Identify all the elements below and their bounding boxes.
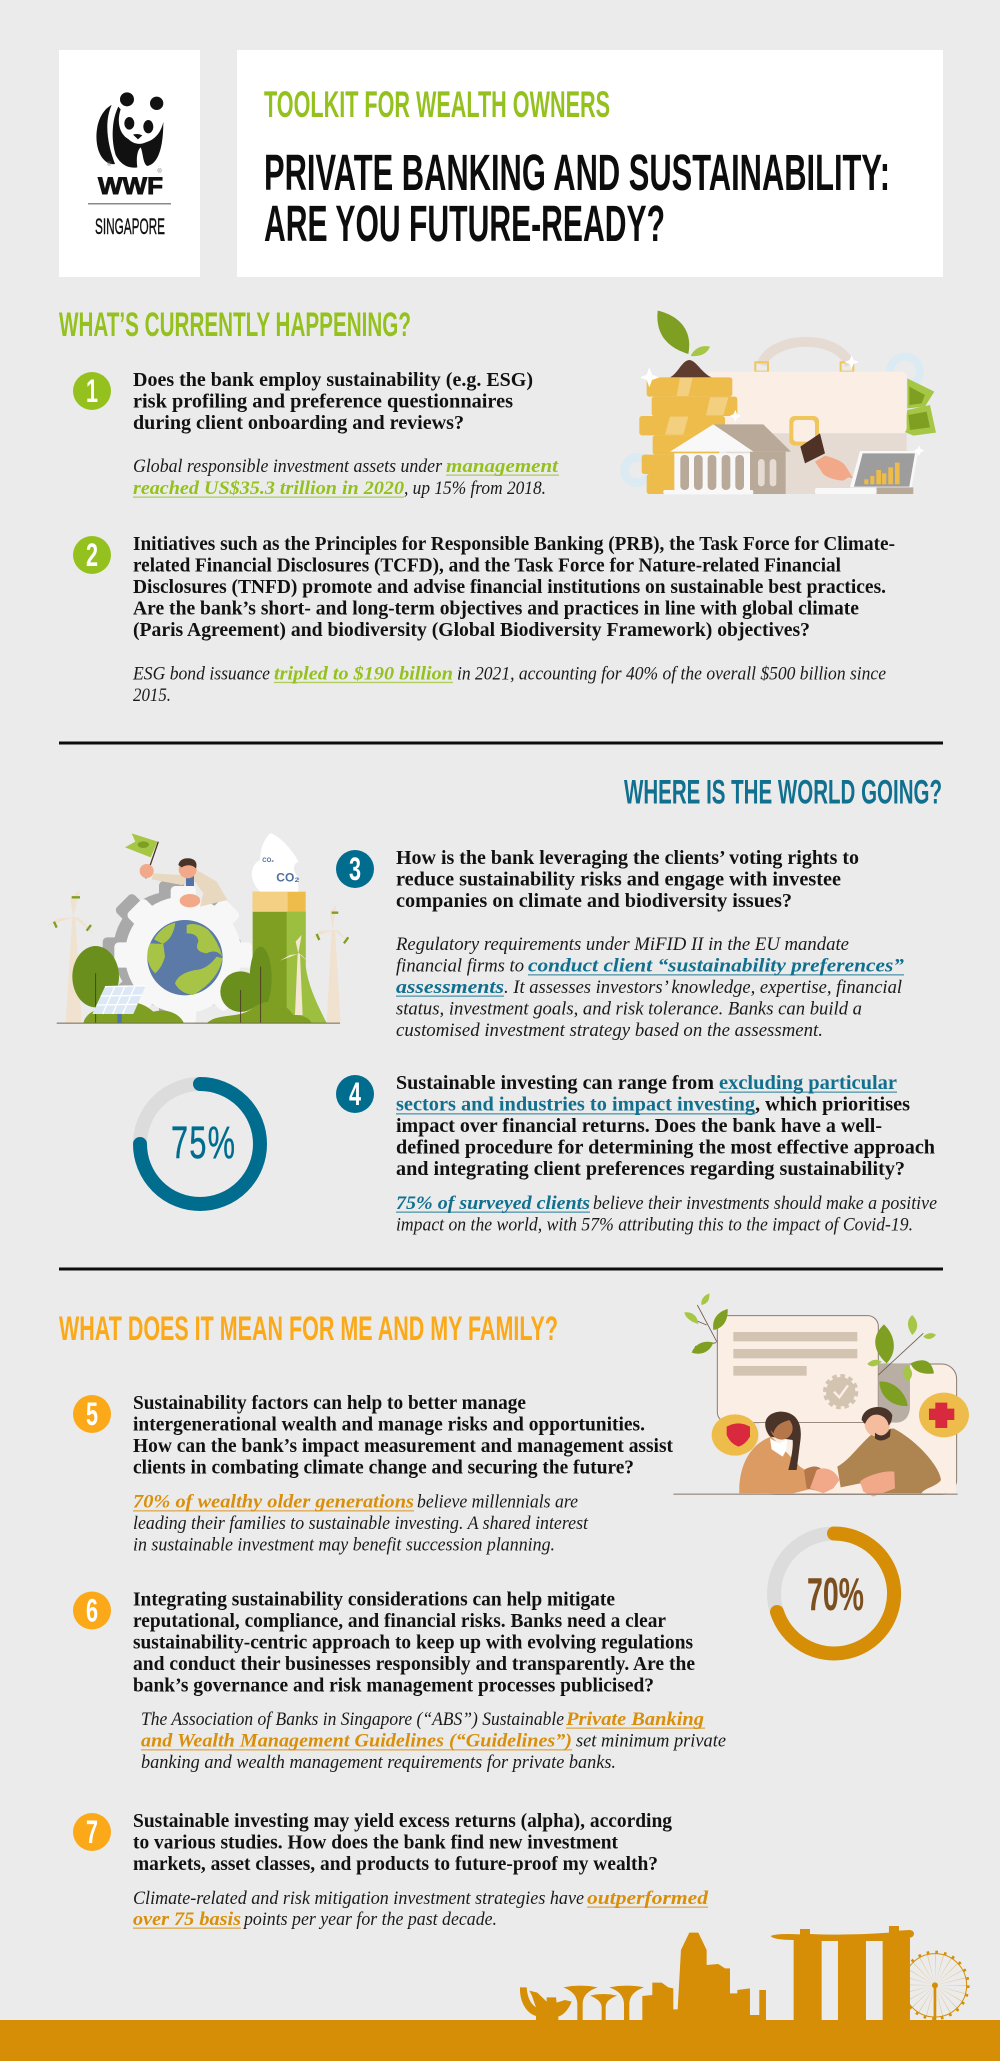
donut chart: 75% [140, 1084, 260, 1204]
badge 5: 5 [86, 1396, 98, 1432]
badge 2: 2 [86, 537, 98, 573]
title: ARE YOU FUTURE-READY? [264, 195, 665, 252]
statistic 4: impact on the world, with 57% attributing this to the impact of Covid-19. [396, 1215, 913, 1236]
statistic 5: in sustainable investment may benefit succession planning. [133, 1535, 555, 1556]
statistic 6: banking and wealth management requirements for private banks. [141, 1752, 616, 1773]
item 2 [73, 534, 895, 706]
question 2: (Paris Agreement) and biodiversity (Global Biodiversity Framework) objectives? [133, 620, 810, 641]
statistic 2: in 2021, accounting for 40% of the overall $500 billion since [457, 663, 886, 684]
statistic 7: over 75 basis [133, 1909, 241, 1930]
badge 3 [336, 850, 374, 888]
badge 4: 4 [349, 1076, 361, 1112]
badge 6 [73, 1592, 111, 1630]
question 5 [133, 1393, 674, 1478]
question 4: Sustainable investing can range from [396, 1073, 714, 1094]
donut chart: 70%: 70% [807, 1568, 864, 1620]
question 4: impact over financial returns. Does the bank have a well- [396, 1116, 882, 1137]
statistic 5: 70% of wealthy older generations [133, 1492, 414, 1513]
item 1 [73, 370, 559, 499]
kicker: toolkit: TOOLKIT FOR WEALTH OWNERS [264, 84, 610, 125]
statistic 2: ESG bond issuance [132, 663, 270, 684]
question 4: excluding particular [719, 1073, 897, 1094]
question 4: and integrating client preferences regarding sustainability? [396, 1159, 905, 1180]
statistic 2: tripled to $190 billion [274, 663, 453, 684]
statistic 3: . It assesses investors’ knowledge, expertise, financial [504, 977, 902, 998]
logo wordmark: WWF [98, 173, 163, 200]
question 1: risk profiling and preference questionnaires [133, 392, 513, 412]
statistic 7: points per year for the past decade. [242, 1909, 497, 1930]
statistic 3: assessments [396, 977, 504, 998]
statistic 1: management [446, 456, 559, 477]
statistic 6: and Wealth Management Guidelines (“Guidelines”) [141, 1731, 572, 1752]
question 3 [396, 848, 859, 912]
question 5: clients in combating climate change and securing the future? [133, 1457, 634, 1478]
illustration: gear, globe, chimney and wind turbines: CO₂ [276, 870, 300, 884]
question 4: defined procedure for determining the most effective approach [396, 1138, 935, 1159]
question 3: How is the bank leveraging the clients’ voting rights to [396, 848, 859, 869]
statistic 7: Climate-related and risk mitigation investment strategies have [133, 1888, 584, 1909]
item 5 [73, 1393, 674, 1556]
question 1 [133, 370, 533, 434]
statistic 7: outperformed [587, 1888, 709, 1909]
question 7: markets, asset classes, and products to future-proof my wealth? [133, 1854, 658, 1875]
icon: WWF panda [96, 92, 163, 175]
donut chart: 75%: 75% [171, 1118, 235, 1169]
item 6 [73, 1590, 726, 1773]
statistic 4: 75% of surveyed clients [396, 1193, 590, 1214]
donut chart: 70% [774, 1534, 894, 1654]
question 7: Sustainable investing may yield excess returns (alpha), according [133, 1811, 672, 1832]
statistic 1: , up 15% from 2018. [404, 478, 546, 499]
statistic 1 [133, 456, 559, 499]
panel: logo card [59, 50, 200, 277]
statistic 1: Global responsible investment assets under [133, 456, 443, 477]
heading: what's currently happening: WHAT’S CURRENTLY HAPPENING? [59, 306, 411, 344]
statistic 6 [141, 1709, 726, 1773]
question 6 [133, 1590, 695, 1697]
illustration: handshake, certificate and coins [673, 1293, 969, 1497]
illustration: Singapore skyline [520, 1926, 968, 2021]
icon: WWF panda: © [107, 161, 112, 168]
heading: what does it mean for me and my family: WHAT DOES IT MEAN FOR ME AND MY FAMILY? [59, 1310, 558, 1348]
logo country label: SINGAPORE [95, 214, 165, 239]
question 2: related Financial Disclosures (TCFD), and the Task Force for Nature-related Financial [133, 556, 842, 577]
statistic 3: financial firms to [396, 956, 524, 977]
question 2: Initiatives such as the Principles for Responsible Banking (PRB), the Task Force for Climate- [133, 534, 895, 555]
badge 4 [336, 1075, 374, 1113]
question 7: to various studies. How does the bank find new investment [133, 1833, 618, 1854]
question 2: Are the bank’s short- and long-term objectives and practices in line with global climate [133, 598, 859, 620]
question 1: Does the bank employ sustainability (e.g. ESG) [133, 370, 533, 391]
badge 3: 3 [349, 851, 361, 887]
illustration: gear, globe, chimney and wind turbines [47, 833, 352, 1024]
badge 2 [73, 536, 111, 574]
question 5: How can the bank’s impact measurement and management assist [133, 1436, 674, 1457]
illustration: gear, globe, chimney and wind turbines: CO₂ [262, 858, 274, 864]
question 4 [396, 1073, 935, 1180]
badge 5 [73, 1395, 111, 1433]
item 7 [73, 1811, 709, 1930]
statistic 5: leading their families to sustainable investing. A shared interest [133, 1513, 589, 1534]
question 3: companies on climate and biodiversity issues? [396, 891, 792, 912]
statistic 4 [396, 1193, 937, 1236]
statistic 3 [395, 934, 905, 1041]
badge 7: 7 [86, 1814, 98, 1850]
panel: title card [237, 50, 943, 277]
statistic 1: reached US$35.3 trillion in 2020 [133, 478, 405, 499]
badge 7 [73, 1813, 111, 1851]
badge 1 [73, 372, 111, 410]
icon: WWF panda: ® [157, 168, 162, 175]
question 3: reduce sustainability risks and engage with investee [396, 870, 841, 891]
badge 1: 1 [86, 373, 98, 409]
question 2 [133, 534, 895, 641]
statistic 6: Private Banking [565, 1709, 704, 1730]
statistic 7 [133, 1888, 709, 1930]
question 2: Disclosures (TNFD) promote and advise financial institutions on sustainable best practices. [133, 577, 886, 598]
question 4: sectors and industries to impact investing [396, 1095, 755, 1116]
statistic 6: set minimum private [576, 1731, 726, 1752]
question 6: bank’s governance and risk management processes publicised? [133, 1676, 654, 1697]
item 3 [336, 848, 905, 1041]
badge 6: 6 [86, 1592, 98, 1628]
question 1: during client onboarding and reviews? [133, 413, 464, 434]
statistic 2: 2015. [133, 685, 171, 706]
footer band [0, 2020, 1000, 2061]
question 5: intergenerational wealth and manage risks and opportunities. [133, 1415, 645, 1436]
question 6: reputational, compliance, and financial risks. Banks need a clear [133, 1611, 666, 1632]
question 5: Sustainability factors can help to better manage [133, 1393, 526, 1414]
title [264, 144, 890, 252]
statistic 5: believe millennials are [417, 1492, 578, 1513]
item 4 [336, 1073, 937, 1236]
question 6: Integrating sustainability considerations can help mitigate [133, 1590, 615, 1611]
statistic 6: The Association of Banks in Singapore (“ABS”) Sustainable [141, 1709, 564, 1730]
question 6: and conduct their businesses responsibly and transparently. Are the [133, 1654, 695, 1675]
statistic 3: customised investment strategy based on the assessment. [396, 1020, 823, 1041]
statistic 5 [133, 1492, 589, 1556]
question 7 [133, 1811, 672, 1875]
statistic 3: conduct client “sustainability preferences” [528, 956, 905, 977]
illustration: briefcase, coins, bank and laptop [625, 311, 936, 494]
question 4: , which prioritises [755, 1095, 910, 1116]
question 6: sustainability-centric approach to keep up with evolving regulations [133, 1633, 693, 1654]
statistic 4: believe their investments should make a positive [593, 1193, 937, 1214]
statistic 2 [132, 663, 886, 706]
statistic 3: Regulatory requirements under MiFID II in the EU mandate [395, 934, 849, 955]
statistic 3: status, investment goals, and risk tolerance. Banks can build a [396, 999, 862, 1020]
